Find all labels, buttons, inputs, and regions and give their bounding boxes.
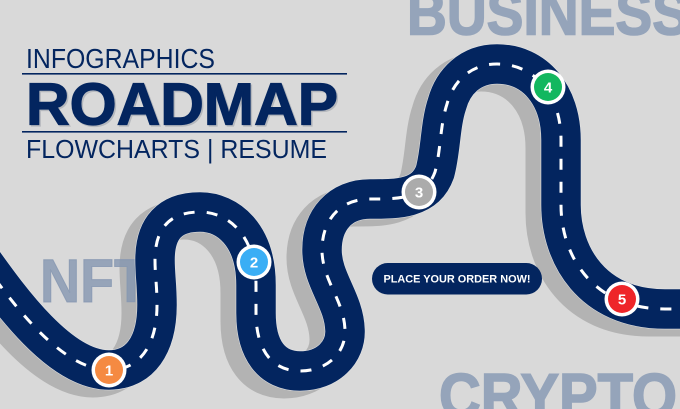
subheading: flowcharts and resume: FLOWCHARTS | RESUME <box>26 134 327 164</box>
top rule <box>22 73 347 75</box>
order button: PLACE YOUR ORDER NOW! <box>384 274 530 286</box>
marker 4: 4 <box>544 80 553 96</box>
marker 2: 2 <box>250 254 258 272</box>
marker 1: 1 <box>105 362 113 380</box>
marker 5 <box>604 282 640 316</box>
marker 3: 3 <box>415 184 423 202</box>
winding road <box>0 64 680 371</box>
heading: INFOGRAPHICS: INFOGRAPHICS <box>26 43 215 74</box>
heading: ROADMAP: ROADMAP <box>26 72 338 138</box>
watermark: NFT: NFT <box>40 247 148 315</box>
heading: ROADMAP: ROADMAP <box>28 73 340 139</box>
marker 4 <box>530 70 566 104</box>
marker 3 <box>402 174 436 210</box>
bottom rule <box>22 131 347 133</box>
marker 5: 5 <box>618 292 626 308</box>
road shadow <box>0 72 680 379</box>
order button <box>372 263 542 294</box>
marker 2 <box>236 244 272 280</box>
marker 1 <box>92 352 126 388</box>
title block <box>22 43 347 164</box>
